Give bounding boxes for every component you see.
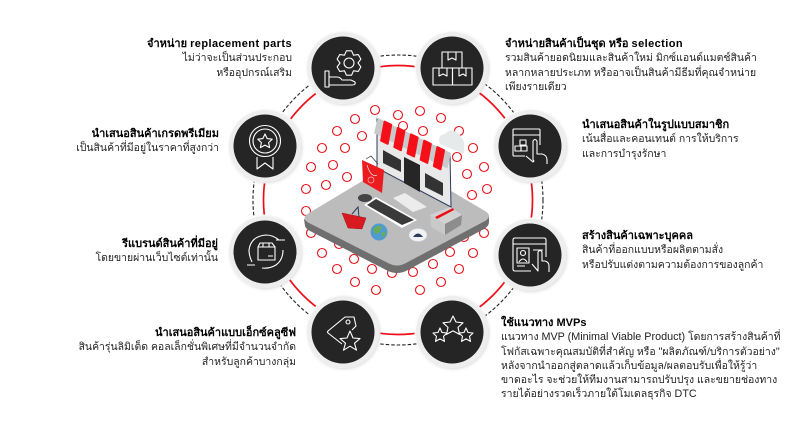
- shopping basket: [342, 207, 366, 229]
- badge: exclusive: [306, 294, 380, 370]
- keyboard: [364, 197, 417, 228]
- badge: replacement parts: [306, 30, 380, 106]
- text: premium goods: นำเสนอสินค้าเกรดพรีเมียม: [92, 128, 219, 140]
- text: subscription: [582, 118, 739, 160]
- monitor storefront: [377, 119, 451, 207]
- striped awning: [374, 118, 451, 169]
- badge: rebrand: [228, 214, 302, 290]
- text: subscription: และการบำรุงรักษา: [582, 149, 666, 160]
- text: MVPs: หลังจากนำออกสู่ตลาดแล้วเก็บข้อมูล/ผลตอบรับเพื่อให้รู้ว่า: [501, 361, 757, 372]
- badge: selection: [414, 30, 490, 106]
- monitor stand: [393, 193, 427, 212]
- text: exclusive: [79, 325, 296, 368]
- text: exclusive: สำหรับลูกค้าบางกลุ่ม: [202, 357, 296, 368]
- text: subscription: เน้นสื่อและคอนเทนต์ การให้บริการ: [582, 134, 739, 145]
- text: selection: หลากหลายประเภท หรืออาจเป็นสินค้ามีธีมที่คุณจำหน่าย: [505, 68, 756, 79]
- text: rebrand: รีแบรนด์สินค้าที่มีอยู่: [122, 238, 218, 250]
- icon: tag and star: [328, 317, 360, 350]
- text: rebrand: [96, 235, 218, 264]
- text: replacement parts: หรืออุปกรณ์เสริม: [216, 68, 292, 79]
- dashed ring: [253, 55, 543, 345]
- delivery box: [430, 207, 462, 235]
- badge: premium: [228, 108, 302, 184]
- polka dot background: [302, 106, 492, 294]
- globe: [370, 224, 388, 240]
- badge: subscription: [492, 108, 568, 184]
- text: rebrand: โดยขายผ่านเว็บไซต์เท่านั้น: [96, 253, 218, 264]
- text: selection: จำหน่ายสินค้าเป็นชุด หรือ selection: [505, 38, 683, 50]
- shopping bag: [362, 156, 384, 193]
- badge: MVPs: [414, 294, 490, 370]
- badge: personalised: [492, 218, 568, 292]
- text: replacement parts: ไม่ว่าจะเป็นส่วนประกอบ: [183, 53, 292, 64]
- text: subscription: นำเสนอสินค้าในรูปแบบสมาชิก: [582, 119, 729, 131]
- icon: medal: [250, 126, 280, 169]
- text: exclusive: นำเสนอสินค้าแบบเอ็กซ์คลูซีฟ: [155, 327, 296, 339]
- icon: profile window: [513, 238, 549, 272]
- icon: box with refresh arrows: [247, 235, 285, 268]
- icon: three stars: [433, 316, 473, 341]
- text: exclusive: สินค้ารุ่นลิมิเต็ด คอลเล็กชั่นพิเศษที่มีจำนวนจำกัด: [79, 342, 296, 353]
- text: personalised: สร้างสินค้าเฉพาะบุคคล: [582, 230, 693, 242]
- platform: [304, 162, 489, 273]
- text: MVPs: ขาดอะไร จะช่วยให้ทีมงานสามารถปรับปรุง และขยายช่องทาง: [501, 375, 777, 386]
- text: premium goods: [76, 128, 219, 154]
- text: personalised: สินค้าที่ออกแบบหรือผลิตตามสั่ง: [582, 245, 723, 256]
- text: MVPs: รายได้อย่างรวดเร็วภายใต้โมเดลธุรกิจ DTC: [501, 388, 697, 400]
- text: premium goods: เป็นสินค้าที่มีอยู่ในราคาที่สูงกว่า: [76, 143, 219, 154]
- icon: window and tap: [513, 129, 547, 164]
- text: personalised: [582, 230, 763, 271]
- user token: [409, 228, 427, 242]
- text: MVPs: โฟกัสเฉพาะคุณสมบัติที่สำคัญ หรือ "ผลิตภัณฑ์/บริการตัวอย่าง": [501, 346, 780, 358]
- icon: stacked boxes: [433, 52, 472, 85]
- text: selection: [505, 36, 757, 93]
- text: personalised: หรือปรับแต่งตามความต้องการของลูกค้า: [582, 260, 763, 271]
- red ring: [264, 66, 532, 334]
- cloud: [439, 130, 464, 154]
- icon: gear and hand: [325, 51, 361, 87]
- text: MVPs: ใช้แนวทาง MVPs: [501, 317, 586, 329]
- text: MVPs: [501, 316, 780, 400]
- mouse: [358, 194, 372, 202]
- illustration: isometric online shop: [304, 118, 489, 273]
- text: MVPs: แนวทาง MVP (Minimal Viable Product) โดยการสร้างสินค้าที่: [501, 331, 780, 343]
- text: replacement parts: จำหน่าย replacement parts: [147, 38, 292, 50]
- text: replacement parts: [147, 38, 292, 79]
- text: selection: เพียงรายเดียว: [505, 82, 567, 93]
- text: selection: รวมสินค้ายอดนิยมและสินค้าใหม่ มิกซ์แอนด์แมตช์สินค้า: [505, 53, 757, 64]
- badges: [228, 30, 568, 370]
